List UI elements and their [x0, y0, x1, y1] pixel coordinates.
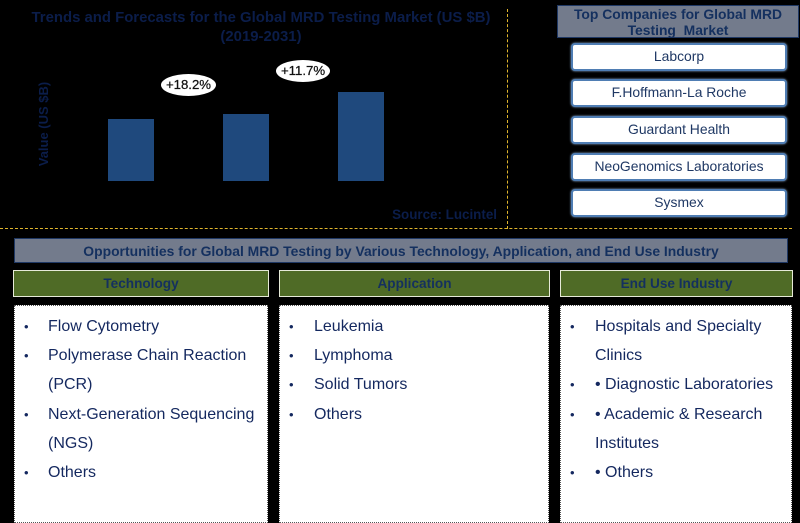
panel: technology: (PCR) [48, 376, 92, 393]
panel: end use industry: • [570, 319, 575, 334]
panel: end use industry: • [570, 465, 575, 480]
header: end use industry: End Use Industry [621, 276, 732, 291]
panel: end use industry: • [570, 377, 575, 392]
opportunities banner: Opportunities for Global MRD Testing by Various Technology, Application, and End Use Industry [83, 243, 719, 259]
panel: end use industry: • Academic & Research [595, 406, 762, 423]
panel: application: Others [314, 406, 362, 423]
panel: technology: • [24, 465, 29, 480]
company: Labcorp: Labcorp [654, 48, 704, 64]
company: NeoGenomics: NeoGenomics Laboratories [594, 158, 764, 174]
panel: technology: • [24, 319, 29, 334]
companies heading [557, 5, 799, 38]
panel: application: Leukemia [314, 318, 383, 335]
panel: end use industry: Hospitals and Specialty [595, 318, 761, 335]
header: application: Application [377, 276, 452, 291]
growth callout 18.2% [161, 74, 216, 96]
panel: application: • [289, 407, 294, 422]
company: Guardant [571, 116, 787, 144]
panel: application: • [289, 319, 294, 334]
header: technology [13, 270, 269, 297]
panel: application: • [289, 377, 294, 392]
company: Sysmex [571, 189, 787, 217]
chart title: (2019-2031) [220, 28, 302, 44]
panel: application: Solid Tumors [314, 376, 407, 393]
panel: end use industry: Clinics [595, 347, 642, 364]
companies heading: Testing Market [628, 22, 728, 38]
company: Sysmex: Sysmex [654, 194, 704, 210]
companies heading: Top Companies for Global MRD [574, 6, 782, 22]
panel: technology: (NGS) [48, 435, 93, 452]
panel: technology: Polymerase Chain Reaction [48, 347, 246, 364]
chart title: Trends and Forecasts for the Global MRD Testing Market (US $B) [32, 10, 490, 26]
panel: technology: • [24, 348, 29, 363]
company: Labcorp [571, 43, 787, 71]
bar 2019 [108, 119, 154, 181]
company list [569, 41, 789, 219]
panel: technology: Others [48, 464, 96, 481]
panel: technology: Next-Generation Sequencing [48, 406, 254, 423]
panel: end use industry: • Others [595, 464, 653, 481]
panel: end use industry: • Diagnostic Laboratories [595, 376, 773, 393]
header: application [279, 270, 550, 297]
panel: technology [14, 305, 268, 523]
panel: application: Lymphoma [314, 347, 393, 364]
panel: application: • [289, 348, 294, 363]
growth callout 18.2%: +18.2% [166, 77, 211, 92]
panel: end use industry [560, 305, 792, 523]
bar 2031 [338, 92, 384, 181]
growth callout 11.7%: +11.7% [281, 63, 325, 78]
chart title [32, 10, 490, 44]
company: NeoGenomics [571, 153, 787, 181]
opportunities banner [14, 238, 788, 263]
company: Roche [571, 79, 787, 107]
header: technology: Technology [103, 276, 179, 291]
header: end use industry [560, 270, 793, 297]
panel: technology: Flow Cytometry [48, 318, 159, 335]
y axis label: Value (US $B) [36, 82, 51, 166]
panel: application [279, 305, 549, 523]
bar 2025 [223, 114, 269, 181]
panel: technology: • [24, 407, 29, 422]
bar chart [108, 92, 384, 181]
source note: Source: Lucintel [392, 207, 497, 222]
company: Roche: F.Hoffmann-La Roche [612, 84, 746, 100]
panel: end use industry: • [570, 407, 575, 422]
panel: end use industry: Institutes [595, 435, 659, 452]
company: Guardant: Guardant Health [628, 121, 730, 137]
growth callout 11.7% [276, 60, 330, 82]
